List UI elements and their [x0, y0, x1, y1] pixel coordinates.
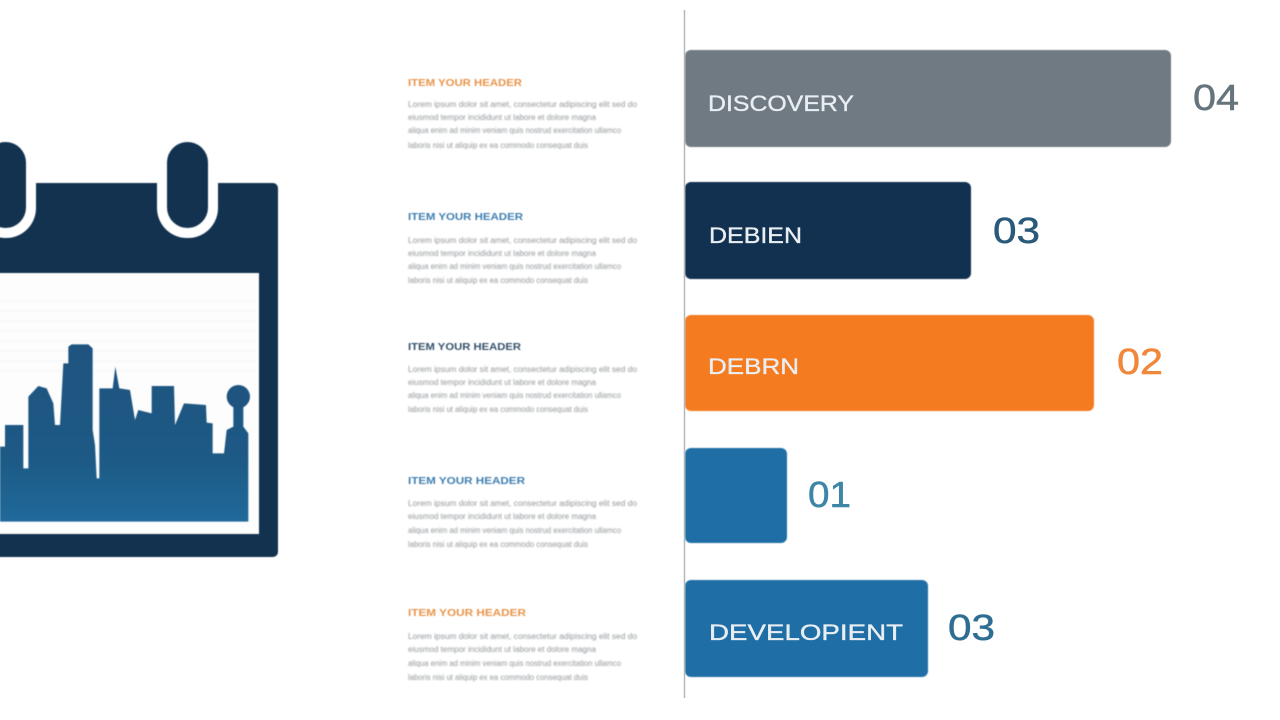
body 2: eiusmod tempor incididunt ut labore et dolore magna [408, 249, 597, 258]
heading 2: ITEM YOUR HEADER [408, 212, 524, 223]
bar: discovery [685, 50, 1239, 147]
calendar page [0, 273, 259, 534]
body 3 [408, 365, 638, 414]
body 3: eiusmod tempor incididunt ut labore et dolore magna [408, 378, 597, 387]
calendar body [0, 183, 278, 557]
body 2: laboris nisi ut aliquip ex ea commodo consequat duis [408, 276, 588, 285]
body 2: Lorem ipsum dolor sit amet, consectetur adipiscing elit sed do [408, 236, 638, 245]
page ruling lines [0, 301, 256, 371]
text block 4 [408, 476, 638, 549]
body 3: Lorem ipsum dolor sit amet, consectetur adipiscing elit sed do [408, 365, 638, 374]
bar chart [685, 50, 1239, 677]
bar: orange phase: DEBRN [708, 354, 799, 379]
text block 5 [408, 608, 638, 682]
left binder ring [0, 131, 36, 238]
heading 1: ITEM YOUR HEADER [408, 78, 523, 89]
body 3: laboris nisi ut aliquip ex ea commodo consequat duis [408, 405, 588, 414]
body 3: aliqua enim ad minim veniam quis nostrud exercitation ullamco [408, 391, 622, 400]
bar: short blue phase: 01 [808, 474, 851, 515]
heading 5: ITEM YOUR HEADER [408, 608, 527, 619]
bar: discovery: 04 [1193, 77, 1239, 118]
bar: short blue phase [685, 448, 851, 543]
body 1: aliqua enim ad minim veniam quis nostrud exercitation ullamco [408, 126, 622, 135]
right binder ring [157, 131, 218, 238]
body 1: eiusmod tempor incididunt ut labore et dolore magna [408, 113, 597, 122]
bar: development [685, 580, 995, 677]
body 1: laboris nisi ut aliquip ex ea commodo consequat duis [408, 141, 588, 150]
text block 2 [408, 212, 638, 285]
heading 3: ITEM YOUR HEADER [408, 342, 522, 353]
body 4: eiusmod tempor incididunt ut labore et dolore magna [408, 512, 597, 521]
heading 4: ITEM YOUR HEADER [408, 476, 526, 487]
bar: design [685, 182, 1040, 279]
body 5: aliqua enim ad minim veniam quis nostrud exercitation ullamco [408, 659, 622, 668]
bar: orange phase: 02 [1117, 341, 1163, 382]
body 2 [408, 236, 638, 285]
bar: design: DEBIEN [709, 223, 802, 248]
body 5: eiusmod tempor incididunt ut labore et dolore magna [408, 645, 597, 654]
body 4: Lorem ipsum dolor sit amet, consectetur adipiscing elit sed do [408, 499, 638, 508]
text block 3 [408, 342, 638, 414]
body 4: aliqua enim ad minim veniam quis nostrud exercitation ullamco [408, 526, 622, 535]
bar: orange phase [685, 315, 1163, 411]
bar: development: 03 [948, 607, 995, 648]
body 1 [408, 100, 638, 150]
body 2: aliqua enim ad minim veniam quis nostrud exercitation ullamco [408, 262, 622, 271]
text block 1 [408, 78, 638, 150]
city skyline [0, 344, 250, 522]
body 4: laboris nisi ut aliquip ex ea commodo consequat duis [408, 540, 588, 549]
body 5: laboris nisi ut aliquip ex ea commodo consequat duis [408, 673, 588, 682]
body 4 [408, 499, 638, 549]
bar: discovery: DISCOVERY [708, 91, 854, 116]
body 5: Lorem ipsum dolor sit amet, consectetur adipiscing elit sed do [408, 632, 638, 641]
body 1: Lorem ipsum dolor sit amet, consectetur adipiscing elit sed do [408, 100, 638, 109]
bar: development: DEVELOPIENT [709, 620, 903, 645]
body 5 [408, 632, 638, 682]
bar: design: 03 [993, 210, 1040, 251]
icon: calendar with city skyline [0, 131, 278, 557]
